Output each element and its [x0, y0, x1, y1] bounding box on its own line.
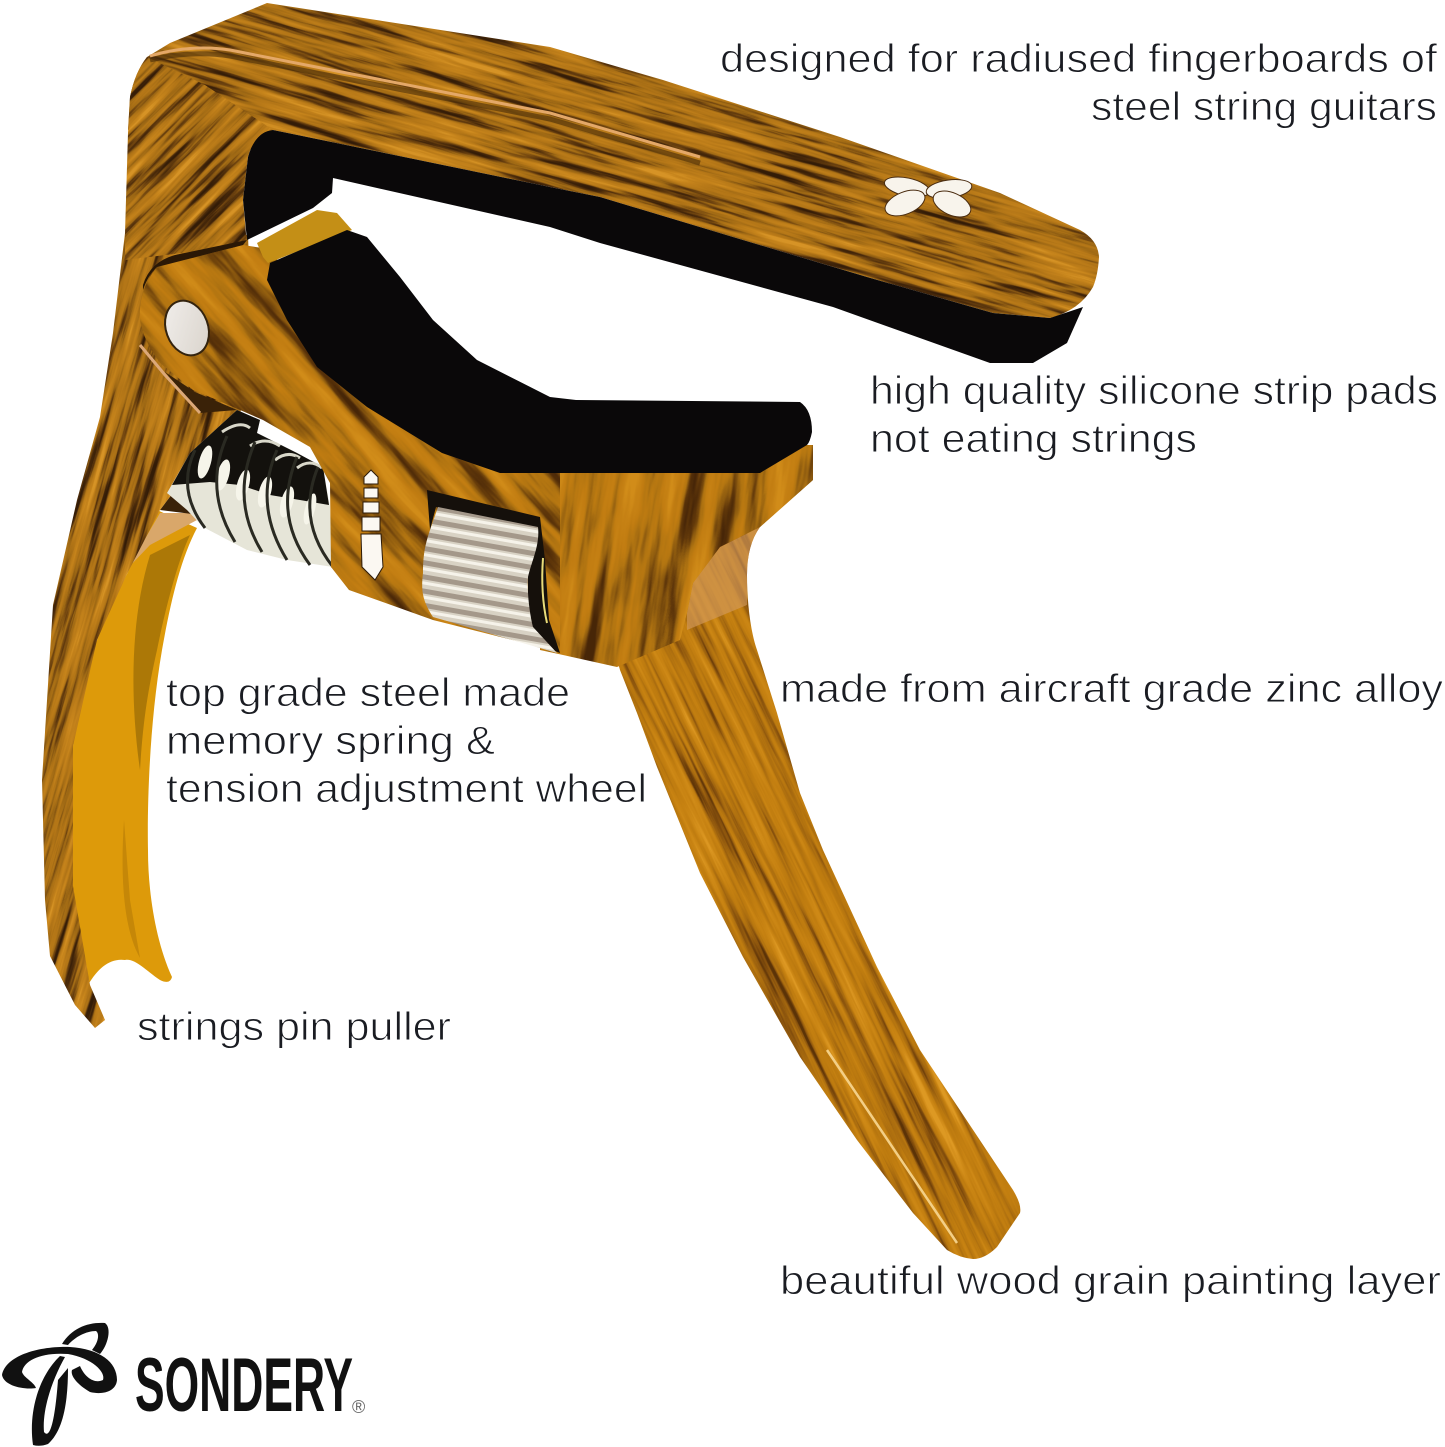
callout: fingerboards: designed for radiused fingerboards of — [720, 37, 1438, 81]
icon: Sondery knot — [2, 1323, 117, 1446]
black jaw pad — [267, 230, 812, 473]
callout: spring and wheel: memory spring & — [166, 719, 495, 763]
wooden top arm — [128, 3, 1099, 318]
capo product photo — [32, 3, 1099, 1444]
tension wheel recess — [427, 490, 560, 653]
gold inner pin puller handle — [73, 470, 205, 985]
metal spring — [167, 410, 333, 567]
peach edge under hinge — [140, 345, 200, 413]
arm ridge highlight — [150, 48, 700, 163]
rivet — [158, 295, 216, 361]
callout: fingerboards — [720, 37, 1438, 129]
callout: silicone pads: not eating strings — [870, 417, 1197, 461]
callout: wood grain: beautiful wood grain painting layer — [780, 1259, 1441, 1303]
wooden jaw body — [540, 445, 813, 667]
callout: spring and wheel: top grade steel made — [166, 671, 570, 715]
dark band under hinge — [165, 372, 237, 413]
brand logo — [2, 1323, 365, 1446]
tension direction arrow — [361, 470, 383, 580]
callout: spring and wheel: tension adjustment wheel — [166, 767, 647, 811]
callout: fingerboards: steel string guitars — [1091, 85, 1437, 129]
callout: zinc alloy: made from aircraft grade zinc alloy — [780, 667, 1443, 711]
callout: spring and wheel — [166, 671, 647, 811]
black silicone strip on top arm — [243, 130, 1083, 363]
callout: pin puller: strings pin puller — [137, 1005, 451, 1049]
brass washer line — [542, 558, 547, 623]
knurled tension wheel — [422, 507, 557, 653]
white logo on arm — [881, 173, 975, 222]
wood spine of capo — [42, 233, 248, 1028]
hinge shadow gap — [143, 240, 247, 290]
callout: silicone pads — [870, 369, 1438, 461]
gold strip above pad — [257, 210, 352, 263]
registered mark: ® — [352, 1397, 365, 1417]
wordmark: SONDERY — [135, 1343, 353, 1428]
wooden lever — [618, 480, 1020, 1259]
lever shoulder highlight — [687, 527, 760, 630]
callout: silicone pads: high quality silicone strip pads — [870, 369, 1438, 413]
wooden hinge plate — [140, 245, 560, 652]
wooden elbow corner — [125, 57, 272, 260]
